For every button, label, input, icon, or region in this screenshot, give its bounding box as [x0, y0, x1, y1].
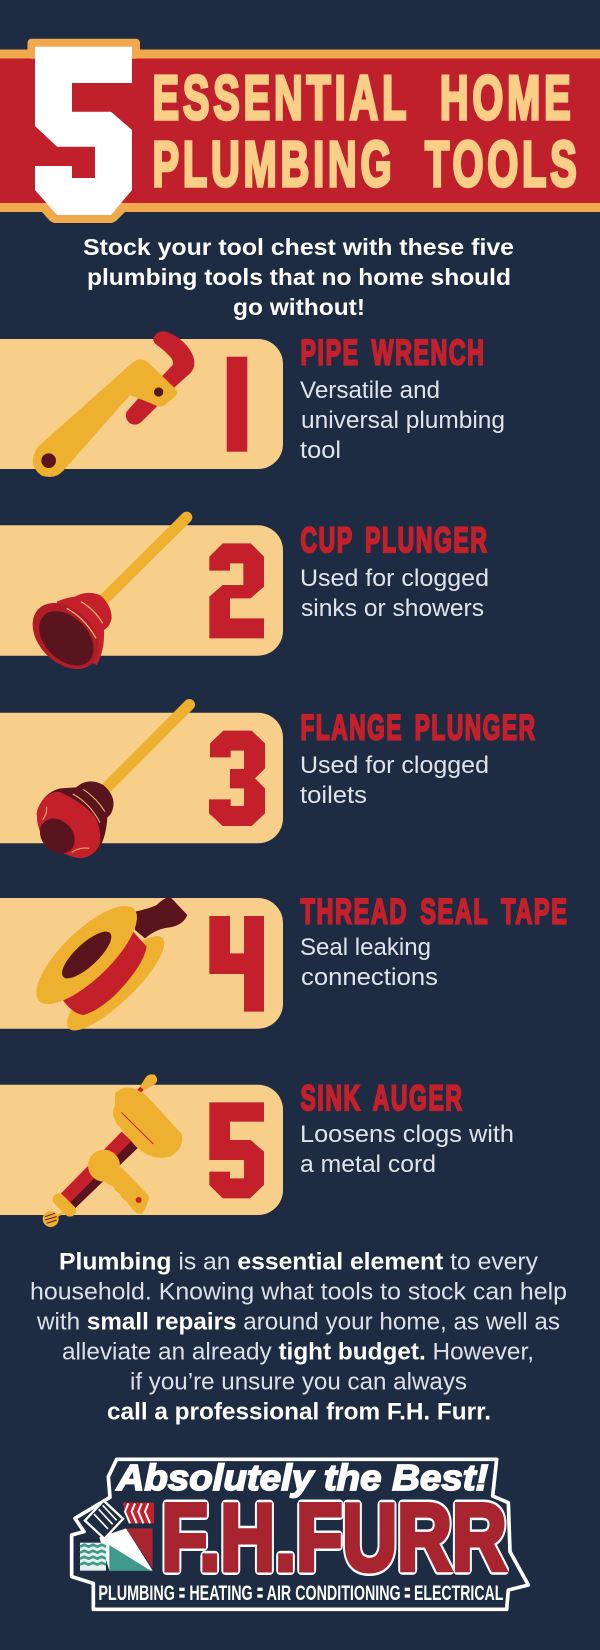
description: pipe wrench: Versatile and [300, 377, 440, 404]
tool 5: sink auger [0, 1074, 514, 1227]
description: flange plunger: Used for clogged [300, 752, 489, 779]
icon: pipe wrench [33, 331, 194, 477]
closing paragraph: Plumbing is an essential element to every [59, 1248, 538, 1275]
intro text [83, 234, 514, 320]
number 5 [209, 1102, 264, 1198]
description: sink auger: a metal cord [300, 1151, 436, 1178]
title text [152, 64, 580, 200]
tool 4: thread seal tape [0, 891, 568, 1042]
icon: thread seal tape [23, 892, 187, 1042]
closing paragraph: call a professional from F.H. Furr. [107, 1398, 491, 1425]
logo services line [98, 1580, 503, 1605]
heading: cup plunger: CUP PLUNGER [300, 520, 488, 560]
closing paragraph: alleviate an already tight budget. However, [62, 1338, 534, 1365]
title banner [0, 39, 600, 223]
description: cup plunger [300, 565, 489, 622]
number 2 [209, 543, 264, 638]
logo: F.H. Furr [72, 1457, 528, 1609]
icon: sink auger [43, 1074, 182, 1227]
description: pipe wrench: universal plumbing [301, 407, 505, 434]
description: cup plunger: sinks or showers [301, 595, 484, 622]
icon: flange plunger [33, 705, 189, 861]
icon: cup plunger [20, 517, 187, 682]
tool 2: cup plunger [0, 517, 489, 682]
number 4 [209, 916, 264, 1012]
heading: pipe wrench: PIPE WRENCH [300, 332, 486, 372]
number 1 [227, 357, 247, 452]
number 3 [209, 731, 265, 826]
description: thread seal tape: connections [301, 964, 438, 991]
big number five badge [28, 39, 140, 223]
description: pipe wrench [300, 377, 505, 464]
description: thread seal tape [300, 934, 438, 991]
card 2 [0, 525, 283, 656]
description: flange plunger: toilets [300, 782, 367, 809]
closing paragraph: household. Knowing what tools to stock can help [30, 1278, 567, 1305]
closing paragraph [30, 1248, 567, 1425]
logo services line: PLUMBING [98, 1580, 175, 1605]
card 4 [0, 898, 283, 1029]
description: flange plunger [300, 752, 489, 809]
card 3 [0, 713, 283, 843]
logo services line: AIR CONDITIONING [267, 1580, 401, 1605]
description: cup plunger: Used for clogged [300, 565, 489, 592]
logo services line: HEATING [189, 1580, 253, 1605]
tool 3: flange plunger [0, 705, 536, 861]
logo services line: ELECTRICAL [414, 1580, 503, 1605]
logo tagline: Absolutely the Best! [116, 1457, 488, 1498]
description: thread seal tape: Seal leaking [300, 934, 431, 961]
intro text: plumbing tools that no home should [87, 264, 511, 290]
logo icon [80, 1501, 154, 1571]
description: pipe wrench: tool [300, 437, 341, 464]
closing paragraph: with small repairs around your home, as well as [36, 1308, 560, 1335]
description: sink auger: Loosens clogs with [300, 1121, 514, 1148]
closing paragraph: if you’re unsure you can always [130, 1368, 467, 1395]
heading: sink auger: SINK AUGER [300, 1078, 464, 1118]
card 5 [0, 1085, 283, 1215]
tool 1: pipe wrench [0, 331, 505, 477]
intro text: Stock your tool chest with these five [83, 234, 514, 260]
intro text: go without! [233, 294, 365, 320]
description: sink auger [300, 1121, 514, 1178]
logo wordmark: F.H.FURR [161, 1485, 507, 1591]
logo wordmark: F.H.FURR [161, 1485, 507, 1591]
card 1 [0, 339, 283, 469]
logo outline [72, 1459, 528, 1609]
